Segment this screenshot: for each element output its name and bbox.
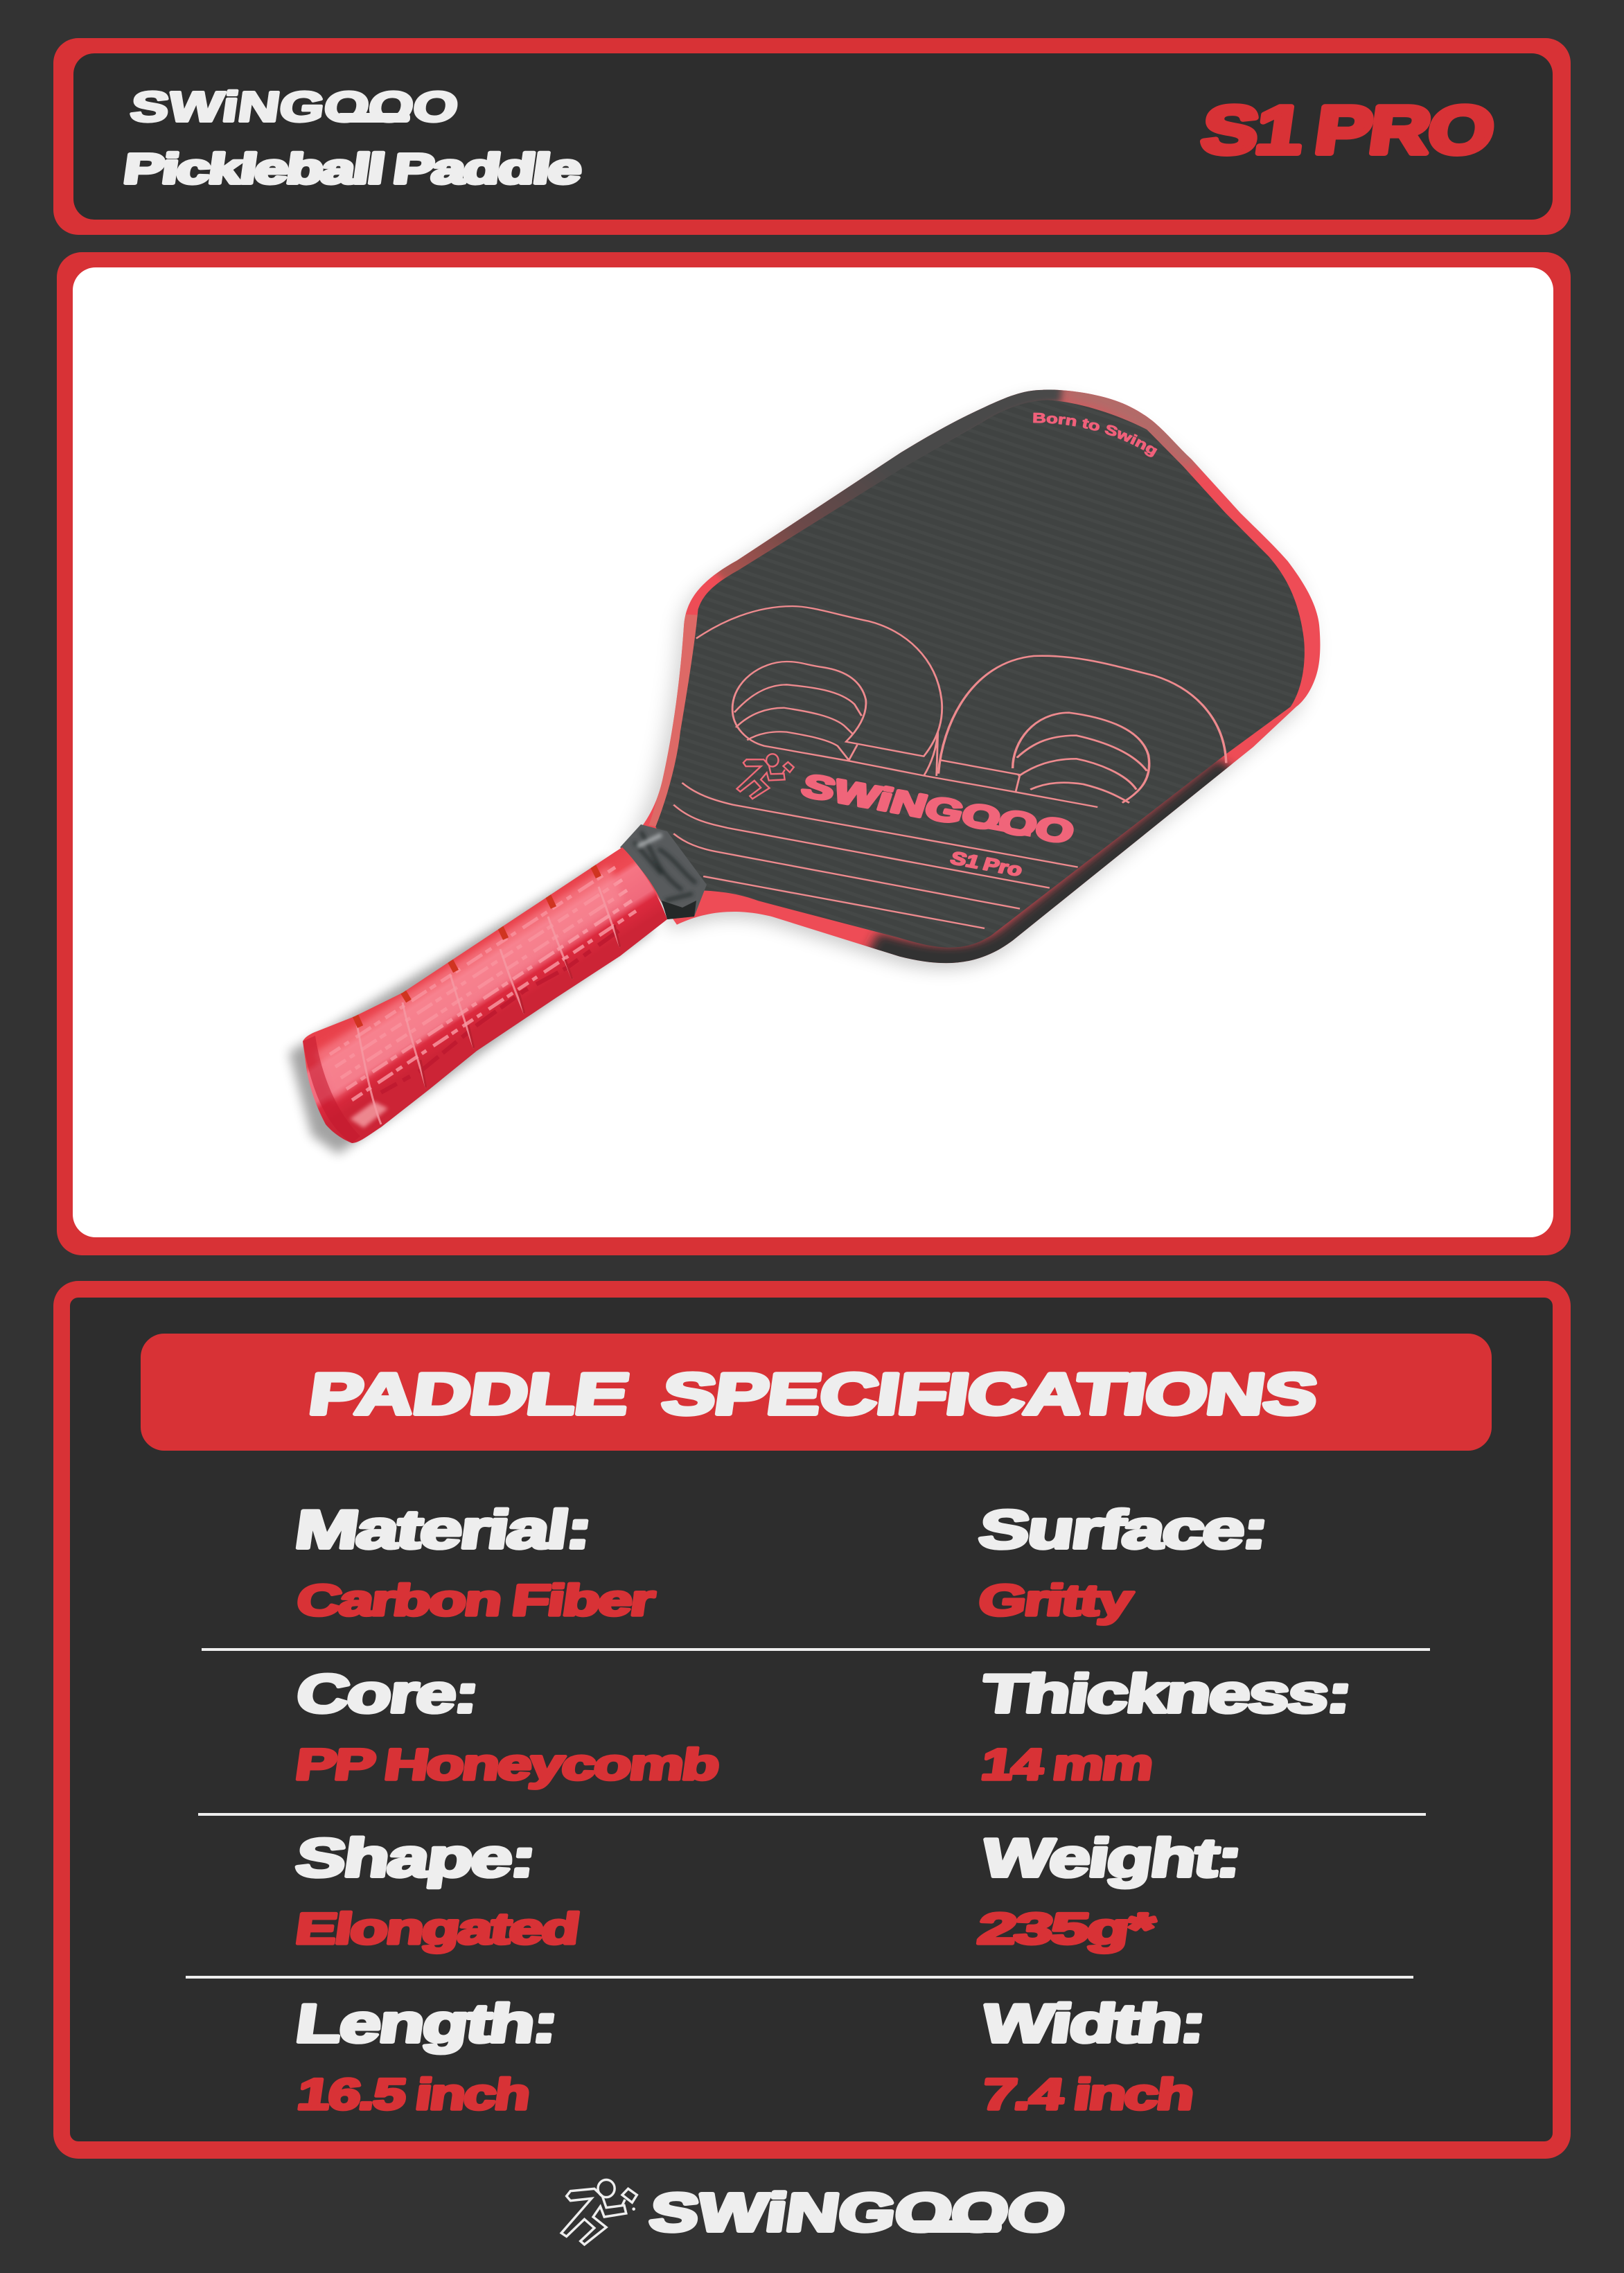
panel: product photo <box>57 252 1571 1255</box>
paddle illustration <box>284 389 1321 1158</box>
spec: surface <box>976 1499 1271 1625</box>
spec: width: Width: <box>979 1993 1208 2053</box>
paddle slogan: Born to Swing <box>1033 413 1157 457</box>
icon: runner on paddle <box>736 750 795 803</box>
spec: shape: Elongated <box>292 1905 581 1953</box>
spec: weight <box>975 1828 1244 1953</box>
brand name: SWiNGOOO <box>127 83 461 130</box>
right bump outlines <box>938 656 1226 803</box>
spec: material <box>292 1499 657 1625</box>
spec: width <box>979 1993 1208 2119</box>
spec: shape <box>292 1828 581 1953</box>
grip <box>303 847 667 1143</box>
paddle logo text: SWiNGOOO <box>797 768 1079 851</box>
product type: Pickleball Paddle <box>121 145 583 192</box>
paddle model text: S1 Pro <box>948 847 1025 881</box>
footer brand name: SWiNGOOO <box>646 2183 1069 2243</box>
spec: thickness <box>978 1663 1354 1789</box>
icon: runner with paddle <box>561 2179 637 2245</box>
section heading: PADDLE SPECIFICATIONS <box>305 1361 1321 1426</box>
spec: core: PP Honeycomb <box>292 1741 721 1789</box>
spec: weight: 235g* <box>975 1905 1158 1953</box>
spec: length: Length: <box>292 1993 561 2053</box>
spec: width: 7.4 inch <box>979 2071 1196 2119</box>
spec: surface: Surface: <box>976 1499 1271 1559</box>
spec: material: Carbon Fiber <box>294 1577 657 1625</box>
spec: material: Material: <box>292 1499 594 1559</box>
section heading <box>141 1334 1492 1451</box>
paddle head <box>603 376 1338 975</box>
spec: length <box>292 1993 561 2119</box>
spec: thickness: Thickness: <box>978 1663 1354 1724</box>
spec: weight: Weight: <box>979 1828 1244 1888</box>
spec: core: Core: <box>293 1663 482 1724</box>
footer logo <box>561 2179 1069 2245</box>
paddle logo text <box>797 768 1079 851</box>
spec: core <box>292 1663 721 1789</box>
neck wrap <box>620 824 707 919</box>
spec: surface: Gritty <box>976 1577 1136 1625</box>
model name: S1 PRO <box>1197 92 1497 168</box>
handle shadow <box>289 858 653 1154</box>
panel: specifications <box>53 1281 1571 2159</box>
spec: shape: Shape: <box>292 1828 538 1888</box>
spec: length: 16.5 inch <box>294 2071 532 2119</box>
paddle graphic lines <box>673 606 1097 928</box>
spec: thickness: 14 mm <box>978 1741 1155 1789</box>
panel: header <box>53 38 1571 235</box>
